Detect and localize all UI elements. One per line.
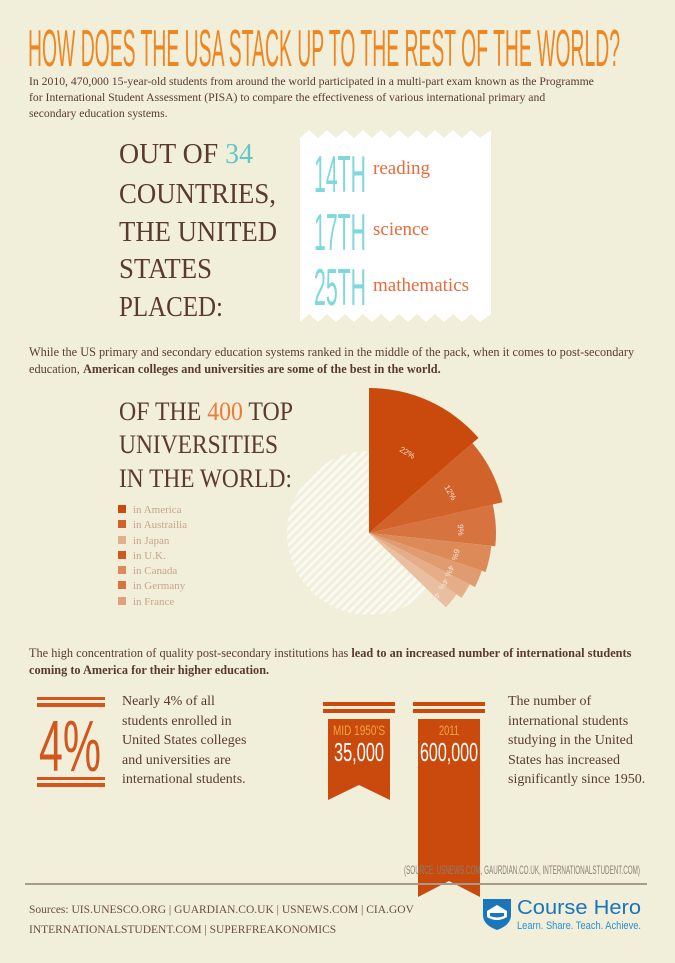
heading: out of 34 countries [119, 139, 277, 285]
text: PLACED: [119, 292, 223, 323]
text: nearly 4%: Nearly 4% of all students enrolled in United States colleges and universities are international students. [122, 694, 246, 787]
legend: in Austrailia [133, 519, 187, 531]
banner: mid 1950s [323, 702, 395, 800]
transition text: While the US primary and secondary education systems ranked in the middle of the pack, when it comes to post-secondary education, American colleges and universities are some of the best in the world. [29, 345, 634, 376]
heading: of the 400 top universities: OF THE 400 TOP [119, 397, 293, 426]
intro text: secondary education systems. [29, 107, 168, 120]
intro text: for International Student Assessment (PISA) to compare the effectiveness of various international primary and [29, 91, 545, 104]
sources [29, 904, 414, 936]
pie chart: 4% [436, 577, 450, 592]
legend [118, 504, 187, 608]
banner: 2011: 2011 [439, 722, 459, 738]
heading: out of 34 countries: OUT OF 34 [119, 139, 253, 170]
pie chart: 22% [398, 445, 416, 461]
pie chart: 4% [428, 590, 442, 605]
heading: out of 34 countries: THE UNITED [119, 217, 277, 248]
heading: of the 400 top universities: UNIVERSITIES [119, 430, 278, 459]
pie chart: 6% [450, 548, 461, 561]
intro text: In 2010, 470,000 15-year-old students from around the world participated in a multi-part exam known as the Programme [29, 75, 594, 88]
pie chart: 4% [443, 564, 456, 578]
legend: in France [133, 596, 174, 608]
heading: out of 34 countries: COUNTRIES, [119, 179, 276, 210]
pie chart: 12% [442, 484, 458, 502]
legend: in Canada [133, 565, 177, 577]
panel: rankings [300, 130, 491, 322]
logo: course hero [483, 897, 641, 932]
text: number of international students: The number of international students studying in the United States has increased significantly since 1950. [508, 694, 645, 787]
legend: in U.K. [133, 550, 166, 562]
rank: reading: reading [373, 158, 430, 179]
pie chart: 9% [456, 524, 465, 536]
banner: 2011 [413, 702, 485, 897]
logo: course hero: Course Hero [517, 897, 641, 919]
sources: INTERNATIONALSTUDENT.COM | SUPERFREAKONOMICS [29, 924, 336, 936]
legend: in America [133, 504, 182, 516]
legend: in Japan [133, 535, 169, 547]
intro text [29, 75, 594, 120]
legend: in Germany [133, 580, 185, 592]
intl students text: The high concentration of quality post-secondary institutions has lead to an increased number of international students coming to America for their higher education. [29, 646, 631, 676]
rank: science: science [373, 219, 429, 240]
heading: of the 400 top universities [119, 397, 293, 493]
pie chart [287, 388, 502, 615]
sources: Sources: UIS.UNESCO.ORG | GUARDIAN.CO.UK | USNEWS.COM | CIA.GOV [29, 904, 414, 916]
rank: mathematics: mathematics [373, 275, 469, 296]
heading: out of 34 countries: STATES [119, 254, 212, 285]
